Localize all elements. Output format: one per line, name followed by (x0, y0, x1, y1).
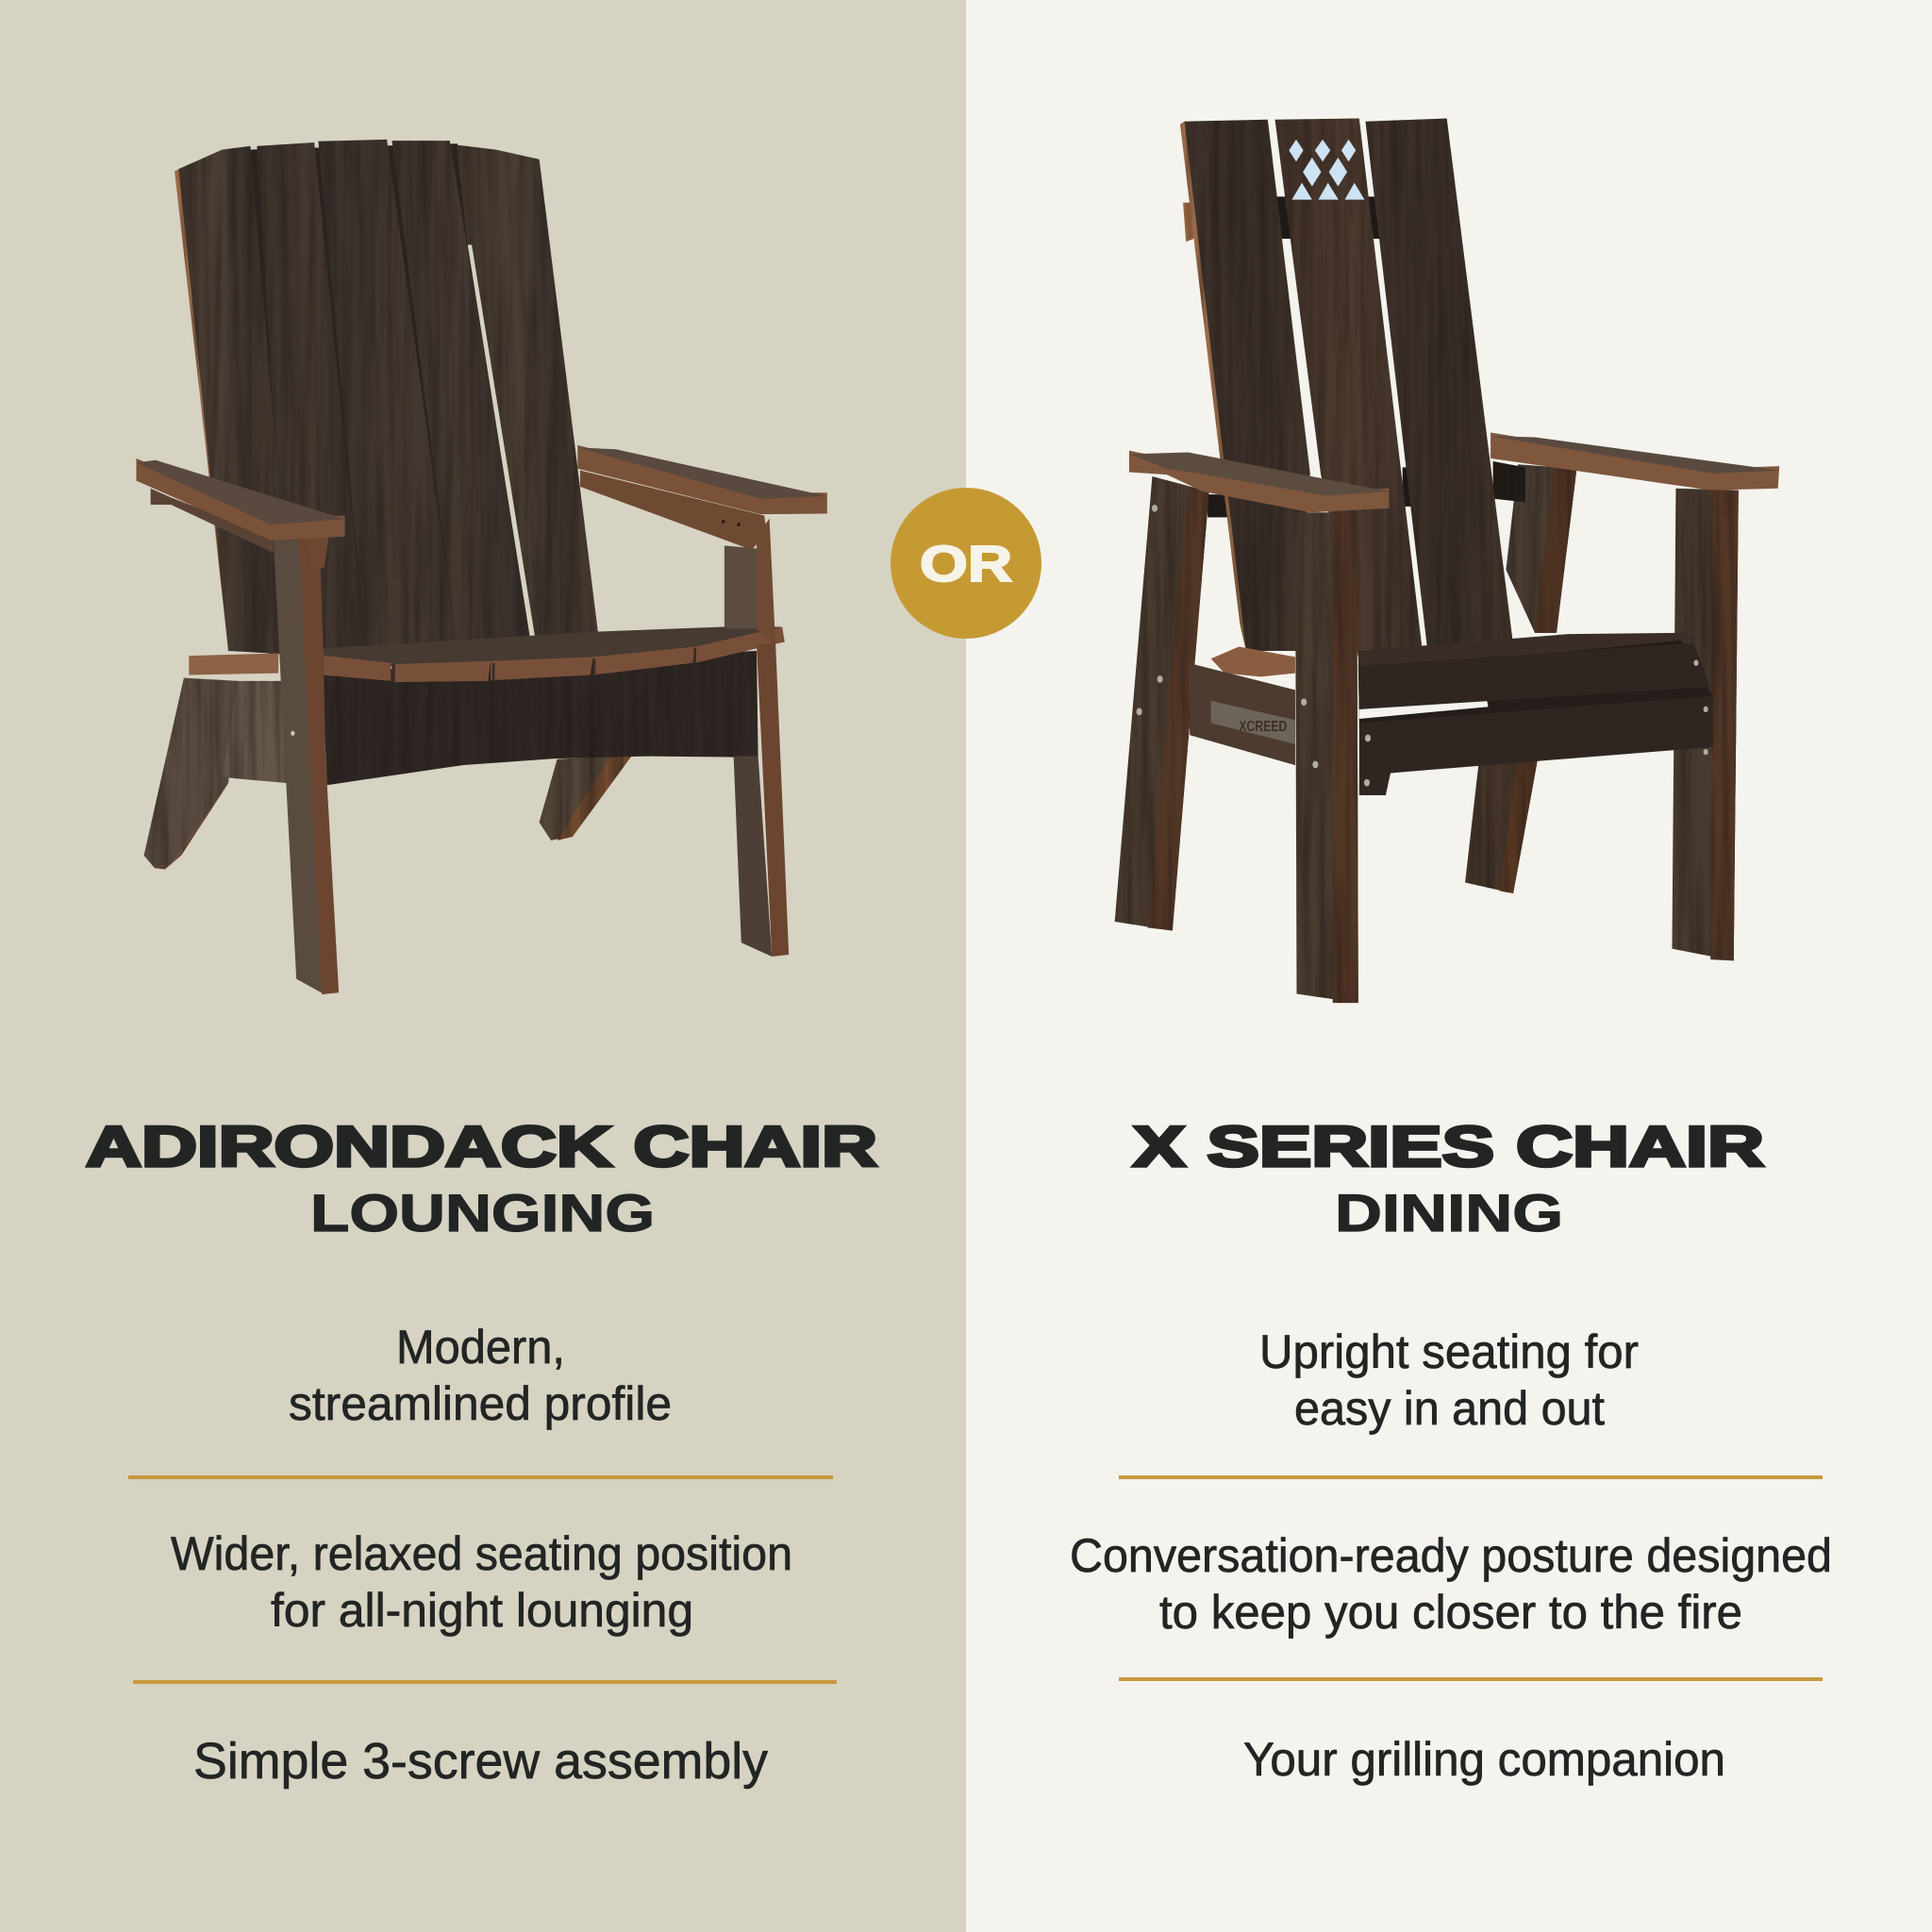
backrest backing (248, 143, 534, 654)
plaque with logo (1211, 701, 1295, 744)
text: modern, streamlined profile: Modern, (396, 1321, 565, 1374)
text: upright seating: Upright seating for (1259, 1325, 1639, 1378)
divider: right two (1119, 1677, 1823, 1681)
photo: x series chair (1115, 119, 1779, 1003)
legs (1115, 476, 1739, 1003)
seat (189, 626, 785, 785)
text: modern, streamlined profile (289, 1321, 672, 1430)
rear legs (1465, 461, 1576, 893)
divider: left one (128, 1475, 833, 1479)
badge: OR: OR (920, 536, 1012, 592)
photo: adirondack chair (136, 140, 827, 994)
arms (1129, 432, 1779, 512)
bolts (1137, 505, 1708, 786)
backrest slats (1180, 119, 1513, 657)
panel: x series chair background (966, 0, 1932, 1932)
light gap between slats (468, 244, 537, 651)
text: wider relaxed seating (171, 1527, 792, 1637)
text: wider relaxed seating: for all-night lounging (271, 1584, 693, 1637)
seat and aprons (1189, 633, 1713, 795)
text: modern, streamlined profile: streamlined profile (289, 1377, 672, 1430)
subheading: dining: DINING (1335, 1183, 1563, 1242)
left arm and front leg (136, 458, 345, 994)
heading: adirondack chair: ADIRONDACK CHAIR (86, 1115, 877, 1178)
divider: right one (1119, 1475, 1823, 1479)
cutout diamonds (1289, 140, 1364, 200)
plaque with logo: XCREED (1239, 717, 1287, 734)
backrest slats (175, 140, 598, 658)
text: upright seating: easy in and out (1294, 1382, 1605, 1435)
panel: adirondack chair background (0, 0, 966, 1932)
text: conversation-ready posture (1070, 1529, 1832, 1639)
text: conversation-ready posture: Conversation-ready posture designed (1070, 1529, 1832, 1582)
right arm and front leg (577, 445, 827, 957)
subheading: lounging: LOUNGING (310, 1183, 655, 1242)
rear legs and side apron (144, 678, 632, 869)
heading: x series chair: X SERIES CHAIR (1133, 1115, 1764, 1178)
badge: OR (891, 488, 1041, 639)
text: conversation-ready posture: to keep you closer to the fire (1159, 1586, 1742, 1639)
text: simple assembly: Simple 3-screw assembly (193, 1733, 768, 1790)
text: upright seating (1259, 1325, 1639, 1435)
divider: left two (133, 1680, 837, 1684)
text: wider relaxed seating: Wider, relaxed seating position (171, 1527, 792, 1580)
text: grilling companion: Your grilling companion (1243, 1733, 1725, 1786)
